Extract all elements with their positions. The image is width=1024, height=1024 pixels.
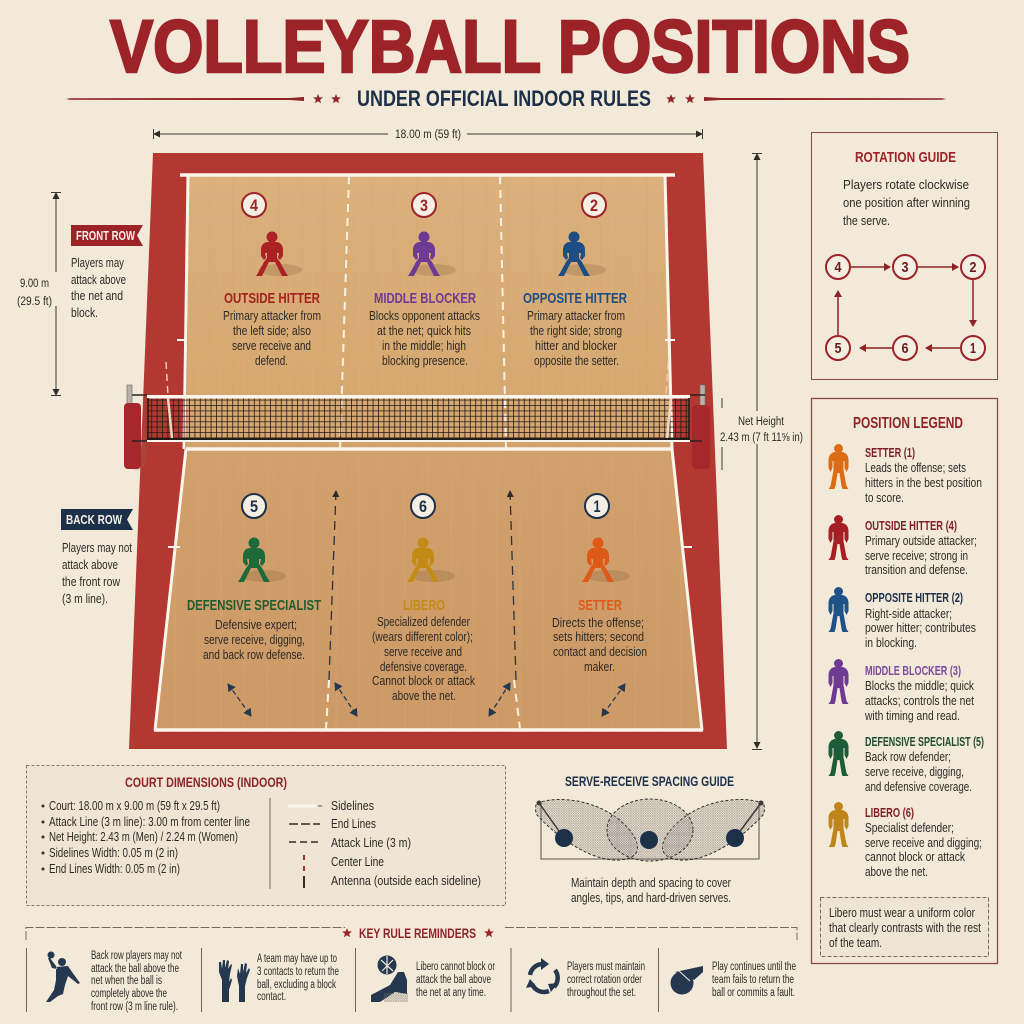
description: blocking presence.	[382, 354, 468, 368]
rotation text: one position after winning	[843, 196, 970, 210]
reminders heading: KEY RULE REMINDERS	[359, 925, 476, 941]
legend: opposite hitter	[828, 587, 976, 650]
description: above the net.	[392, 689, 456, 703]
line-type legend: Sidelines	[331, 799, 374, 813]
legend: setter: Leads the offense; sets	[865, 461, 966, 475]
back row callout	[61, 509, 133, 606]
line-type legend: Center Line	[331, 855, 384, 869]
number badge 6: 6	[419, 497, 427, 516]
player position 3: middle blocker	[369, 193, 480, 368]
dimensions list: Net Height: 2.43 m (Men) / 2.24 m (Women)	[49, 830, 238, 844]
line-type legend: Attack Line (3 m)	[331, 836, 411, 850]
panel: court dimensions	[26, 766, 506, 906]
number badge 2	[582, 193, 606, 217]
rule text 3: Libero cannot block or	[416, 961, 495, 973]
legend: outside hitter: OUTSIDE HITTER (4)	[865, 519, 957, 533]
rule text 1: attack the ball above the	[91, 963, 179, 975]
description: Cannot block or attack	[372, 674, 476, 688]
description: Directs the offense;	[552, 616, 644, 630]
front row note	[71, 256, 126, 320]
number badge 4	[242, 193, 266, 217]
rule text 1	[91, 950, 183, 1013]
rule text 1: net when the ball is	[91, 975, 162, 987]
volleyball court	[129, 153, 727, 749]
number badge 1	[585, 494, 609, 518]
heading: OPPOSITE HITTER	[523, 290, 627, 307]
icon: raised hands	[219, 960, 250, 1002]
front row note: block.	[71, 306, 98, 320]
legend: defensive specialist: and defensive coverage.	[865, 780, 972, 794]
spacing caption	[571, 876, 731, 905]
dimension: half-court depth: (29.5 ft)	[17, 296, 52, 308]
description: (wears different color);	[372, 630, 473, 644]
description: and back row defense.	[203, 648, 305, 662]
rule text 2: ball, excluding a block	[257, 979, 336, 991]
libero note: that clearly contrasts with the rest	[829, 921, 981, 935]
libero note: of the team.	[829, 936, 882, 950]
description	[223, 309, 321, 368]
player position 4: outside hitter	[223, 193, 321, 368]
front row callout	[71, 225, 143, 320]
rotation diagram	[826, 255, 985, 360]
icon: whistle	[670, 966, 703, 994]
rotation diagram: 3	[902, 259, 908, 276]
dimension: half-court depth: 9.00 m	[20, 278, 49, 290]
legend: opposite hitter: in blocking.	[865, 636, 917, 650]
back row note: Players may not	[62, 541, 132, 555]
panel: serve-receive spacing guide	[536, 773, 764, 905]
panel: position legend	[812, 398, 998, 964]
description: defend.	[255, 354, 288, 368]
rotation diagram: 4	[834, 259, 842, 276]
number badge 6	[411, 494, 435, 518]
rule text 4: correct rotation order	[567, 974, 642, 986]
player figure	[558, 232, 606, 276]
line-type legend: Antenna (outside each sideline)	[331, 874, 481, 888]
heading: OUTSIDE HITTER	[224, 290, 320, 307]
rule text 5: ball or commits a fault.	[712, 987, 795, 999]
description: Defensive expert;	[215, 618, 297, 632]
legend heading: POSITION LEGEND	[853, 415, 963, 432]
dimension: court length and net height: Net Height	[738, 416, 785, 428]
legend: middle blocker	[828, 659, 975, 723]
legend: outside hitter	[828, 515, 977, 577]
rotation diagram: 1	[970, 340, 976, 357]
description: in the middle; high	[382, 339, 466, 353]
heading: SETTER	[578, 597, 622, 614]
legend: libero: serve receive and digging;	[865, 836, 982, 850]
player figure	[256, 232, 302, 276]
description: maker.	[584, 660, 615, 674]
description: contact and decision	[553, 645, 647, 659]
dimensions list: Sidelines Width: 0.05 m (2 in)	[49, 846, 178, 860]
dimension: court length and net height	[718, 154, 806, 750]
description: defensive coverage.	[380, 660, 467, 674]
rotation text: Players rotate clockwise	[843, 178, 969, 192]
legend: defensive specialist: serve receive, digging,	[865, 765, 964, 779]
legend: outside hitter: serve receive; strong in	[865, 549, 968, 563]
back row badge: BACK ROW	[66, 512, 123, 527]
legend: outside hitter: Primary outside attacker;	[865, 534, 977, 548]
spacing heading: SERVE-RECEIVE SPACING GUIDE	[565, 773, 734, 789]
dimensions list	[42, 799, 250, 876]
description	[372, 615, 476, 703]
rule text 4: Players must maintain	[567, 961, 645, 973]
rule text 2: contact.	[257, 991, 286, 1003]
legend: setter: SETTER (1)	[865, 446, 915, 460]
rule text 2: 3 contacts to return the	[257, 966, 339, 978]
player position 2: opposite hitter	[523, 193, 627, 368]
front row note: the net and	[71, 289, 123, 303]
heading: LIBERO	[403, 597, 445, 614]
rotation diagram: 5	[834, 340, 842, 357]
description: serve receive, digging,	[204, 633, 305, 647]
dimensions list: Court: 18.00 m x 9.00 m (59 ft x 29.5 ft)	[49, 799, 220, 813]
number badge 4: 4	[250, 196, 258, 215]
description: the right side; strong	[530, 324, 622, 338]
description: sets hitters; second	[553, 630, 644, 644]
libero note: Libero must wear a uniform color	[829, 906, 975, 920]
spacing caption: angles, tips, and hard-driven serves.	[571, 891, 731, 905]
legend: libero: cannot block or attack	[865, 850, 966, 864]
player position 1: setter	[552, 494, 647, 716]
legend: setter	[828, 444, 982, 505]
panel: key rule reminders	[26, 925, 797, 1013]
heading: MIDDLE BLOCKER	[374, 290, 476, 307]
icon: back row attacker	[46, 952, 80, 1002]
legend: middle blocker: MIDDLE BLOCKER (3)	[865, 664, 961, 678]
rule text 2: A team may have up to	[257, 953, 337, 965]
legend: opposite hitter: power hitter; contributes	[865, 621, 976, 635]
rule text 5: team fails to return the	[712, 974, 794, 986]
number badge 2: 2	[590, 196, 598, 215]
heading: DEFENSIVE SPECIALIST	[187, 597, 321, 614]
back row note: the front row	[62, 575, 121, 589]
rotation diagram: 2	[970, 259, 976, 276]
legend: opposite hitter: Right-side attacker;	[865, 607, 952, 621]
player figure	[407, 538, 455, 582]
description	[203, 618, 305, 662]
description	[369, 309, 480, 368]
rotation text: the serve.	[843, 214, 890, 228]
line-type legend: End Lines	[331, 817, 376, 831]
player position 5: defensive specialist	[187, 494, 321, 716]
dimension: court length and net height: 2.43 m (7 ft 11⅝ in)	[720, 432, 803, 444]
spacing diagram	[536, 799, 764, 861]
player figure	[582, 538, 630, 582]
description: Blocks opponent attacks	[369, 309, 480, 323]
legend: libero: LIBERO (6)	[865, 806, 914, 820]
number badge 5	[242, 494, 266, 518]
rotation text	[843, 178, 970, 228]
movement arrows	[335, 683, 510, 716]
subtitle with ornaments: UNDER OFFICIAL INDOOR RULES	[357, 86, 651, 111]
description: serve receive and	[384, 645, 462, 659]
movement arrow	[228, 684, 251, 716]
rule text 1: completely above the	[91, 988, 167, 1000]
rule text 2	[257, 953, 339, 1003]
legend: defensive specialist: Back row defender;	[865, 750, 951, 764]
rule text 5	[712, 961, 796, 999]
rule text 4	[567, 961, 645, 999]
legend: middle blocker: Blocks the middle; quick	[865, 679, 975, 693]
legend: libero: above the net.	[865, 865, 928, 879]
player figure	[408, 232, 456, 276]
back row note: attack above	[62, 558, 118, 572]
movement arrow	[602, 684, 625, 716]
icon: rotation arrows	[526, 958, 558, 992]
description: at the net; quick hits	[377, 324, 471, 338]
legend: setter: hitters in the best position	[865, 476, 982, 490]
number badge 3	[412, 193, 436, 217]
rotation heading: ROTATION GUIDE	[855, 149, 956, 166]
panel: rotation guide	[812, 132, 998, 380]
subtitle with ornaments	[66, 86, 946, 111]
description: Primary attacker from	[527, 309, 625, 323]
number badge 3: 3	[420, 196, 428, 215]
rule text 1: front row (3 m line rule).	[91, 1001, 178, 1013]
number badge 1: 1	[594, 497, 600, 516]
legend: libero	[828, 802, 982, 879]
description: serve receive and	[232, 339, 311, 353]
legend: opposite hitter: OPPOSITE HITTER (2)	[865, 591, 963, 605]
net and posts	[124, 385, 710, 471]
rule text 3: the net at any time.	[416, 987, 486, 999]
description: opposite the setter.	[534, 354, 619, 368]
line-type legend	[288, 799, 481, 888]
legend: middle blocker: with timing and read.	[864, 709, 960, 723]
front row note: attack above	[71, 273, 126, 287]
libero note	[820, 898, 988, 956]
rule text 5: Play continues until the	[712, 961, 796, 973]
player figure	[238, 538, 286, 582]
rule text 3: attack the ball above	[416, 974, 491, 986]
title: VOLLEYBALL POSITIONS	[110, 5, 910, 88]
dimensions heading: COURT DIMENSIONS (INDOOR)	[125, 774, 287, 790]
back row note	[62, 541, 132, 606]
player position 6: libero	[335, 494, 510, 716]
dimension: half-court depth	[17, 192, 68, 396]
description: the left side; also	[233, 324, 311, 338]
description	[527, 309, 625, 368]
legend: libero: Specialist defender;	[865, 821, 954, 835]
rule text 1: Back row players may not	[91, 950, 183, 962]
spacing caption: Maintain depth and spacing to cover	[571, 876, 731, 890]
description	[552, 616, 647, 674]
legend: middle blocker: attacks; controls the net	[865, 694, 974, 708]
description: Primary attacker from	[223, 309, 321, 323]
description: Specialized defender	[377, 615, 470, 629]
legend: outside hitter: transition and defense.	[865, 563, 968, 577]
icon: libero dig	[371, 956, 408, 1002]
rule text 4: throughout the set.	[567, 987, 636, 999]
rotation diagram: 6	[902, 340, 908, 357]
dimensions list: End Lines Width: 0.05 m (2 in)	[49, 862, 180, 876]
legend: setter: to score.	[865, 491, 904, 505]
number badge 5: 5	[250, 497, 258, 516]
dimensions list: Attack Line (3 m line): 3.00 m from center line	[49, 815, 250, 829]
back row note: (3 m line).	[62, 592, 108, 606]
description: hitter and blocker	[535, 339, 617, 353]
dimension: court width: 18.00 m (59 ft)	[395, 129, 461, 141]
front row note: Players may	[71, 256, 125, 270]
legend: defensive specialist	[828, 731, 984, 794]
rule text 3	[416, 961, 495, 999]
front row badge: FRONT ROW	[76, 228, 136, 243]
